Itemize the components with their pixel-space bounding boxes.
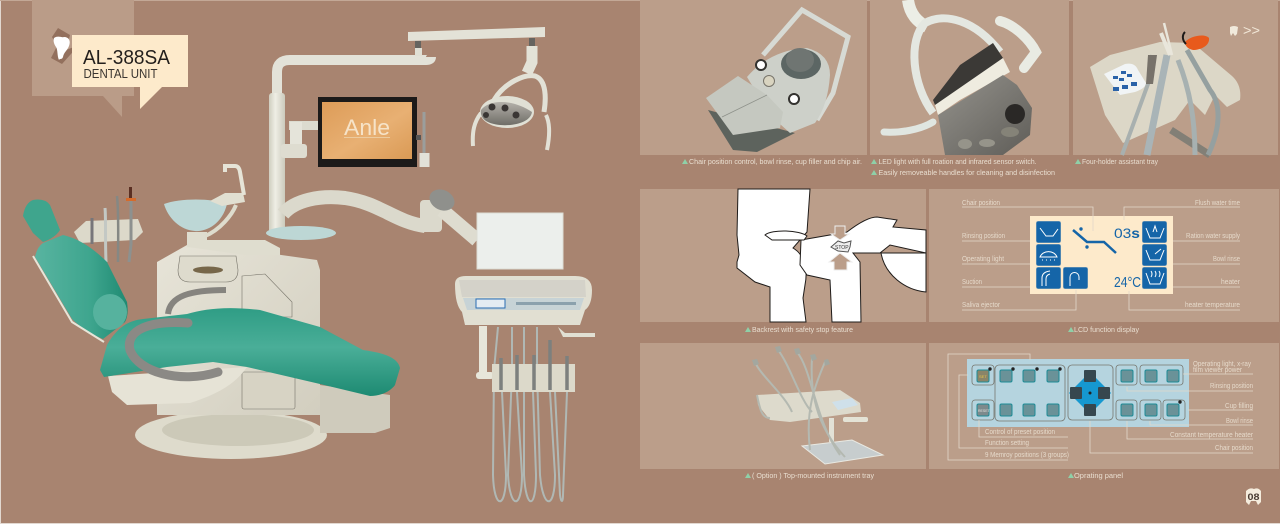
panel labels: Control of preset position xyxy=(985,429,1055,436)
chevrons: >> xyxy=(1243,22,1260,38)
caption: LCD: LCD function display xyxy=(1074,325,1139,334)
LCD labels: heater xyxy=(1221,279,1241,286)
panel: LCD function display xyxy=(929,189,1279,322)
panel labels: Rinsing position xyxy=(1210,383,1253,390)
panel: top-mounted tray xyxy=(640,343,926,469)
control panel face: RESET xyxy=(978,409,991,413)
LCD temperature readout: 24°C xyxy=(1114,274,1141,291)
LCD screen xyxy=(1030,216,1173,294)
LCD labels: Saliva ejector xyxy=(962,302,1001,309)
panel: foot control xyxy=(640,0,867,155)
operating lamp xyxy=(473,38,549,150)
headrest xyxy=(23,200,60,242)
stop marker xyxy=(829,226,852,270)
assistant tray illustration xyxy=(1090,23,1240,155)
icon: tooth logo xyxy=(51,28,79,64)
monitor xyxy=(318,97,430,167)
caption: LED lamp: Easily removeable handles for cleaning and disinfection xyxy=(878,168,1055,177)
LCD icon tiles xyxy=(1036,221,1167,289)
caption: assistant tray: Four-holder assistant tray xyxy=(1082,157,1158,166)
LCD labels: Rinsing position xyxy=(962,233,1005,240)
panel labels: Constant temperature heater xyxy=(1170,432,1254,439)
central pillar and lamp arm xyxy=(269,27,545,233)
navigation arrows xyxy=(1230,22,1260,38)
caption: top-mounted tray: ( Option ) Top-mounted instrument tray xyxy=(752,471,874,480)
glass shelf xyxy=(266,226,336,240)
viewer box xyxy=(477,213,563,269)
LCD labels: Suction xyxy=(962,279,982,286)
panel: assistant tray xyxy=(1073,0,1278,155)
icon: small tooth xyxy=(1230,26,1238,36)
LCD labels: Operating light xyxy=(962,256,1004,263)
button groups xyxy=(972,365,1185,421)
instrument console xyxy=(455,276,595,337)
page number badge xyxy=(1246,488,1261,505)
LCD icon glyphs xyxy=(1040,226,1164,286)
panel labels: 9 Memroy positions (3 groups) xyxy=(985,452,1069,459)
panel: operating panel xyxy=(929,343,1279,469)
keypad xyxy=(1104,64,1146,95)
assistant tray xyxy=(74,187,143,262)
caption: LED lamp: LED light with full roation and infrared sensor switch. xyxy=(878,157,1036,166)
stop marker: STOP xyxy=(835,245,849,251)
page number: 08 xyxy=(1248,492,1260,502)
function keys xyxy=(977,370,1179,416)
panel labels xyxy=(985,361,1254,459)
panel callout lines xyxy=(948,354,1253,460)
panel: backrest safety stop xyxy=(640,189,926,322)
key legends: SET xyxy=(979,374,987,379)
panel: LED lamp xyxy=(870,0,1069,155)
leg support xyxy=(320,385,390,433)
control panel face xyxy=(967,359,1189,427)
caption: operating panel: Oprating panel xyxy=(1074,471,1123,480)
panel labels: Chair position xyxy=(1215,445,1253,452)
panel labels: Bowl rinse xyxy=(1226,418,1253,425)
top-mounted tray illustration xyxy=(752,346,883,464)
LCD labels: heater temperature xyxy=(1185,302,1240,309)
LCD labels xyxy=(962,200,1241,309)
cabinet xyxy=(157,245,320,415)
panel labels: film viewer power xyxy=(1193,367,1243,374)
delivery arm xyxy=(283,197,425,226)
LCD callout lines xyxy=(962,207,1240,310)
LED lamp illustration xyxy=(884,0,1036,155)
title block xyxy=(32,0,188,117)
LCD labels: Flush water time xyxy=(1195,200,1240,207)
backrest line diagram xyxy=(737,189,926,322)
backrest xyxy=(35,235,128,339)
caption: LED lamp xyxy=(871,157,1055,177)
title speech bubble xyxy=(72,35,188,109)
blue direction pad xyxy=(1069,372,1111,414)
LCD chair glyph xyxy=(1073,230,1116,253)
title text: AL-388SA xyxy=(83,47,171,69)
panel labels: Function setting xyxy=(985,440,1029,447)
icon: tooth badge xyxy=(1246,488,1261,505)
subtitle text: DENTAL UNIT xyxy=(84,66,158,81)
LCD labels: Chair position xyxy=(962,200,1000,207)
floor base xyxy=(135,411,327,459)
hoses xyxy=(493,327,567,501)
LCD time readout: 03s xyxy=(1114,225,1140,241)
panel labels: Cup filling xyxy=(1225,403,1253,410)
curing light tip xyxy=(1185,35,1209,50)
rear arm xyxy=(168,290,226,314)
seat frame xyxy=(108,367,247,405)
caption: foot control: Chair position control, bowl rinse, cup filler and chip air. xyxy=(689,157,862,166)
seat cushion xyxy=(100,308,400,396)
LCD labels: Ration water supply xyxy=(1186,233,1240,240)
instrument holder xyxy=(476,326,575,392)
direction keys xyxy=(1070,370,1110,416)
LCD labels: Bowl rinse xyxy=(1213,256,1240,263)
title backing tab xyxy=(32,0,134,117)
monitor logo: Anle xyxy=(344,115,390,140)
panel labels: Operating light, x-ray xyxy=(1193,361,1251,368)
caption: backrest: Backrest with safety stop feature xyxy=(752,325,853,334)
foot control illustration xyxy=(706,10,848,152)
indicator dots xyxy=(988,367,1182,404)
dental unit illustration xyxy=(23,27,595,501)
armrest xyxy=(129,322,218,377)
spittoon xyxy=(164,166,280,255)
